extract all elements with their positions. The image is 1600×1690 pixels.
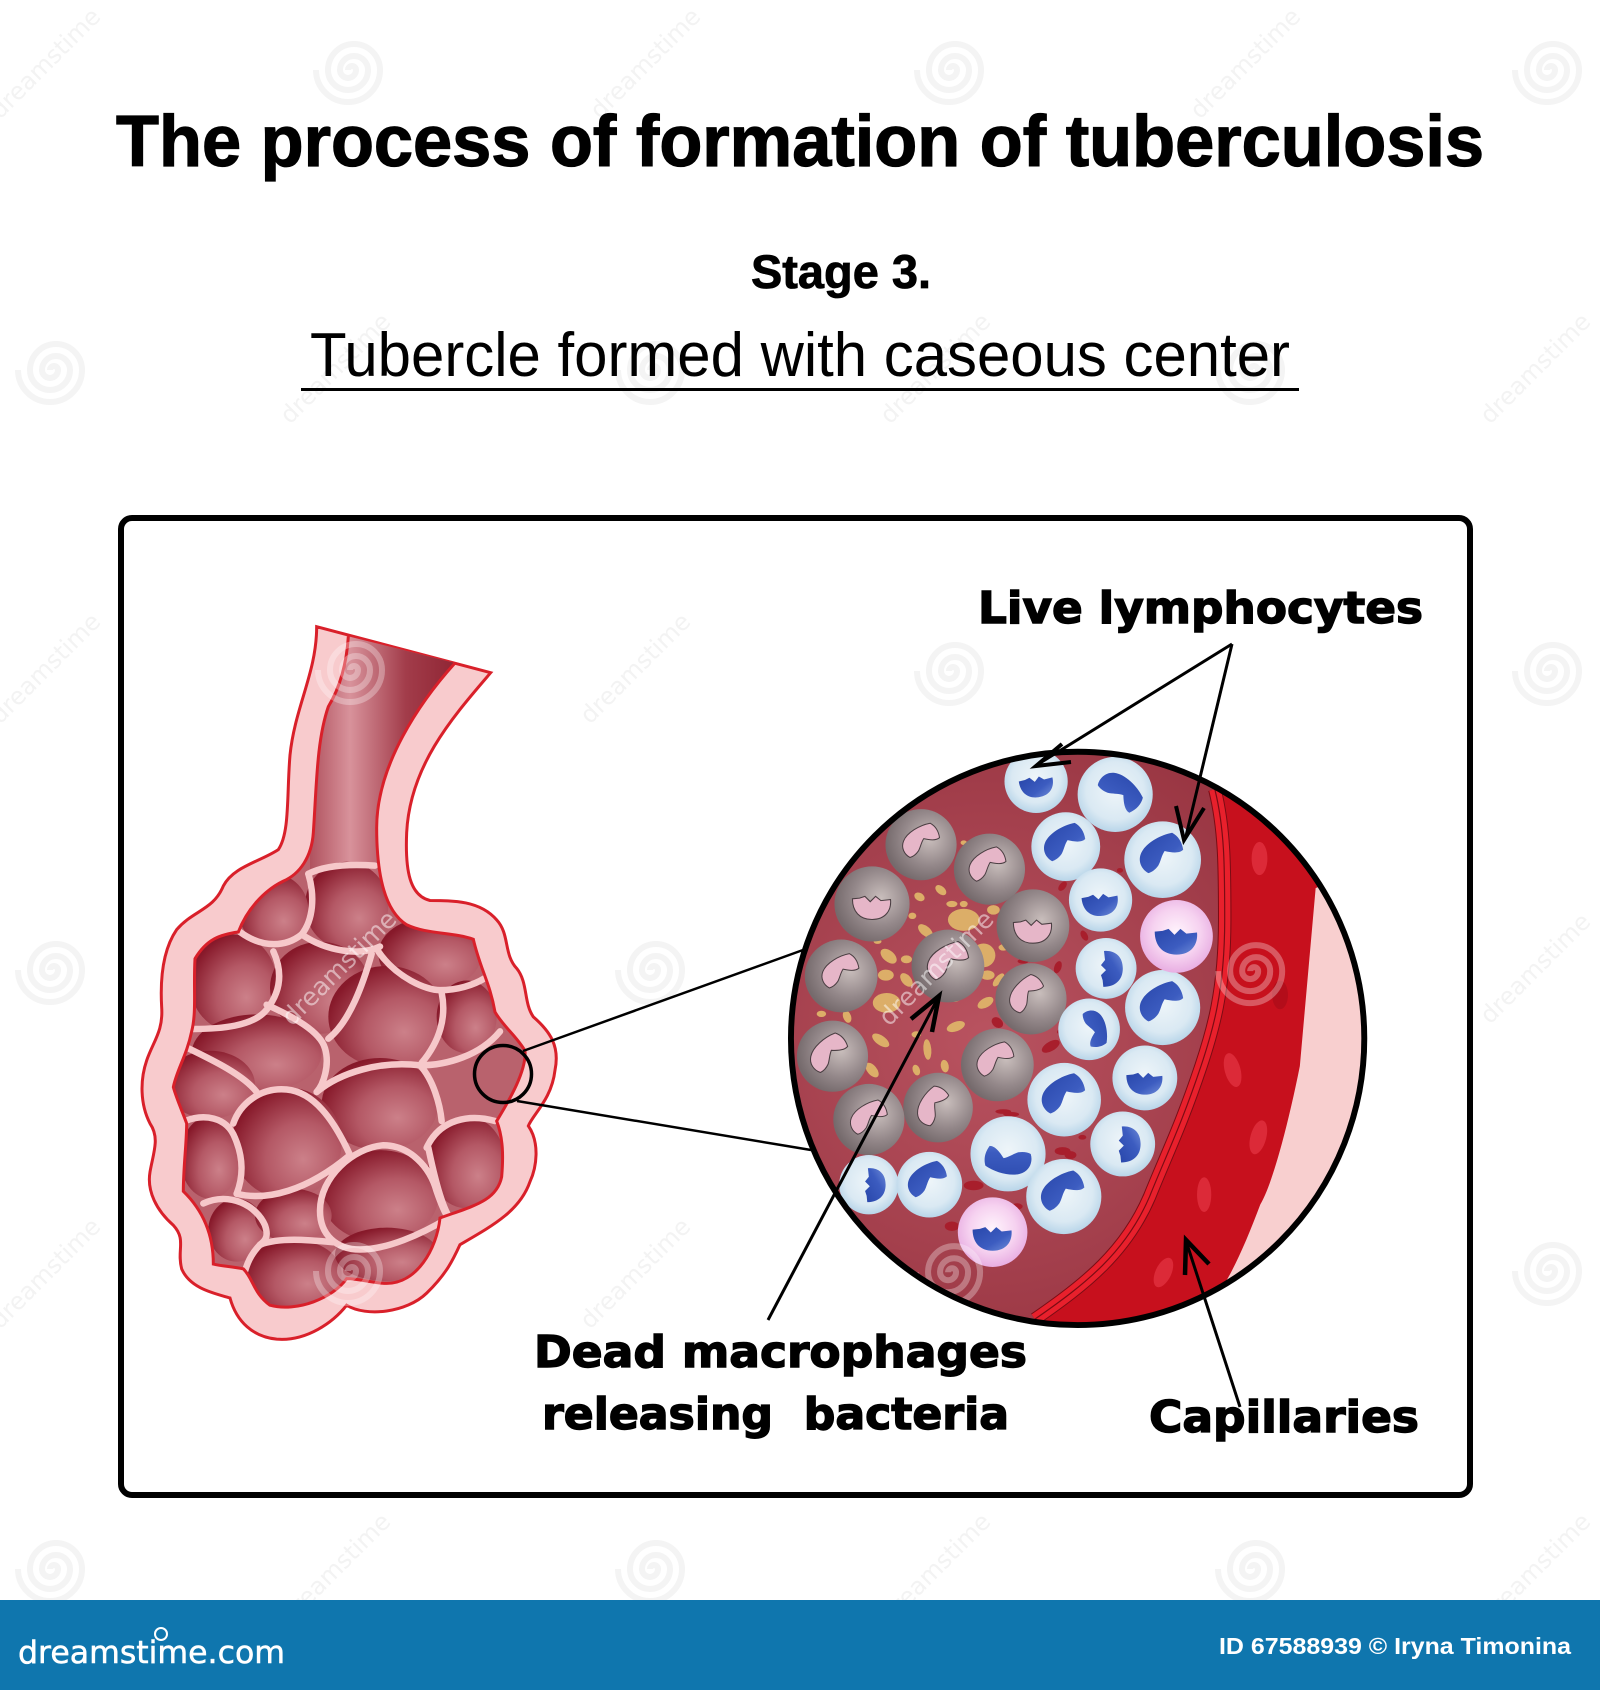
tissue background — [794, 754, 1218, 1319]
leader lines to magnified view — [517, 950, 811, 1150]
label: dead macrophages: Dead macrophages — [534, 1327, 1027, 1378]
background watermark pattern: dreamstime — [874, 1508, 996, 1629]
footer logo text: dreamstime.com — [18, 1635, 285, 1671]
alveoli cluster illustration — [142, 624, 556, 1339]
arrow: dead macrophages — [768, 996, 939, 1320]
magnifier ring on alveolus — [474, 1046, 532, 1102]
background watermark pattern: dreamstime — [574, 1213, 696, 1334]
pink cells — [958, 900, 1213, 1267]
subtitle: Tubercle formed with caseous center — [310, 321, 1290, 390]
watermarks over circle — [873, 905, 1282, 1304]
footer bar — [0, 1600, 1600, 1690]
label: live lymphocytes: Live lymphocytes — [978, 583, 1423, 634]
arrow: capillaries — [1185, 1240, 1240, 1407]
background watermark pattern: dreamstime — [1474, 908, 1596, 1029]
magnified circle — [788, 748, 1368, 1328]
background watermark pattern: dreamstime — [274, 308, 396, 429]
watermark overlays on alveoli — [276, 644, 402, 1303]
title: The process of formation of tuberculosis — [116, 102, 1484, 182]
label: dead macrophages — [534, 1327, 1027, 1440]
arrows: live lymphocytes — [1036, 644, 1232, 840]
background watermark pattern: dreamstime — [584, 3, 706, 124]
background watermark pattern: dreamstime — [1184, 3, 1306, 124]
watermarks over circle: dreamstime — [873, 905, 999, 1031]
dead macrophages — [797, 809, 1069, 1155]
alveolus outer wall — [142, 627, 556, 1339]
stage heading: Stage 3. — [751, 245, 931, 298]
live lymphocytes — [839, 750, 1201, 1234]
background watermark pattern: dreamstime — [574, 608, 696, 729]
label: capillaries: Capillaries — [1149, 1392, 1419, 1443]
panel: diagram frame — [121, 518, 1470, 1495]
background watermark pattern: dreamstime — [274, 1508, 396, 1629]
capillary — [1031, 790, 1362, 1322]
alveolus interior — [174, 636, 524, 1306]
circle outline — [791, 752, 1364, 1325]
alveolus inner outline — [173, 636, 525, 1307]
watermark overlays on alveoli: dreamstime — [276, 905, 402, 1031]
bacteria — [817, 840, 1008, 1080]
background watermark pattern: dreamstime — [874, 308, 996, 429]
red blood spots — [945, 868, 1123, 1231]
footer credit text: ID 67588939 © Iryna Timonina — [1219, 1633, 1571, 1659]
label: dead macrophages: releasing bacteria — [542, 1389, 1009, 1440]
background watermark pattern: dreamstime — [1474, 308, 1596, 429]
background watermark pattern: dreamstime — [1474, 1508, 1596, 1629]
